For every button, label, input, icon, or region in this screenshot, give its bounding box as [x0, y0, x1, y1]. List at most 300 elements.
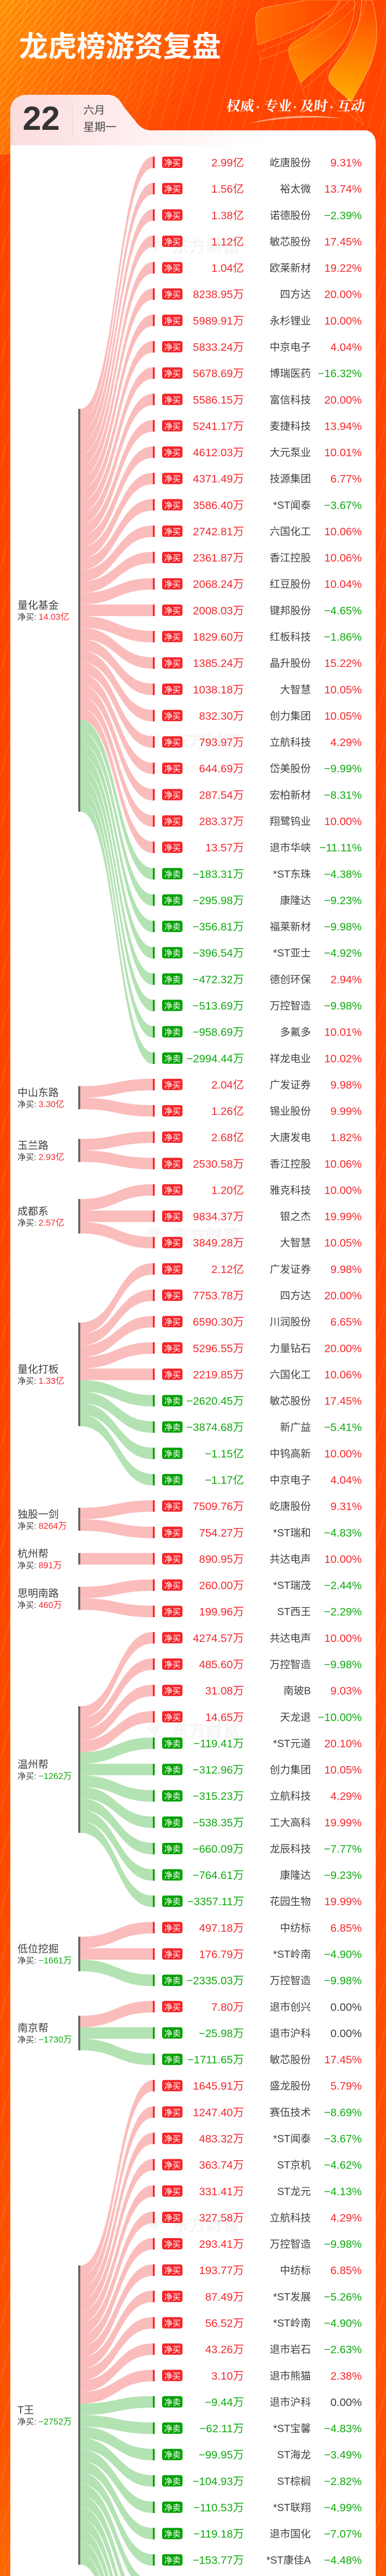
- row: 康隆达: 康隆达: [280, 894, 311, 906]
- row: 雅克科技: 1.20亿: [212, 1184, 244, 1196]
- row: *ST闻泰: [80, 499, 362, 570]
- row: 退市沪科: 退市沪科: [270, 2396, 311, 2408]
- row: ST棕榈: [80, 2438, 362, 2487]
- row: 六国化工: 2219.85万: [193, 1368, 244, 1381]
- row: *ST瑞茂: −2.44%: [324, 1580, 362, 1592]
- row: 盛龙股份: 净买: [164, 2082, 181, 2091]
- row: 退市岩石: 退市岩石: [270, 2344, 311, 2355]
- row: 祥龙电业: 净卖: [164, 1054, 181, 1063]
- row: 立航科技: 净卖: [164, 1792, 181, 1801]
- row: *ST岭南: 净买: [164, 1950, 181, 1959]
- row: 银之杰: [80, 1211, 362, 1223]
- row: 共达电声: 净买: [164, 1634, 181, 1643]
- row: 键邦股份: 净买: [164, 606, 181, 616]
- row: 立航科技: 793.97万: [199, 736, 244, 749]
- row: *ST发展: 净买: [164, 2293, 181, 2302]
- row: 大元泵业: 4612.03万: [193, 446, 244, 459]
- row: 雅克科技: [80, 1184, 362, 1211]
- row: 万控智造: [80, 1960, 362, 1987]
- row: 六国化工: 六国化工: [270, 526, 311, 538]
- group: T王: [17, 2080, 362, 2576]
- row: 晶升股份: 15.22%: [324, 657, 362, 670]
- row: 麦捷科技: [80, 420, 362, 535]
- row: 银之杰: 9834.37万: [193, 1211, 244, 1223]
- row: 退市国化: 净卖: [164, 2530, 181, 2539]
- row: ST达华: [80, 2484, 362, 2576]
- row: ST海龙: −3.49%: [324, 2449, 362, 2461]
- row: 翔鹭钨业: 翔鹭钨业: [270, 816, 311, 827]
- row: 广发证券: 9.98%: [330, 1079, 362, 1091]
- decorative flame leaves: [256, 0, 377, 125]
- row: 祥龙电业: −2994.44万: [186, 1053, 244, 1065]
- row: 富信科技: 净买: [164, 396, 181, 405]
- row: 屹唐股份: [80, 1500, 362, 1519]
- row: *ST闻泰: −3.67%: [324, 2133, 362, 2145]
- row: 福莱新材: 福莱新材: [270, 921, 311, 933]
- row: 万控智造: −9.98%: [324, 1658, 362, 1671]
- row: *ST元道: 净卖: [164, 1739, 181, 1749]
- row: 赛伍技术: 赛伍技术: [270, 2107, 311, 2119]
- row: *ST岭南: *ST岭南: [273, 2317, 311, 2329]
- row: 四方达: 8238.95万: [193, 289, 244, 301]
- row: ST棕榈: −2.82%: [324, 2475, 362, 2487]
- row: 裕太微: 净买: [164, 185, 181, 194]
- row: 康隆达: [80, 1810, 362, 1882]
- row: 德创环保: [80, 766, 362, 986]
- row: 退市华峡: −11.11%: [320, 842, 362, 854]
- row: *ST中岩: [80, 2519, 362, 2576]
- row: 大智慧: 10.05%: [324, 1237, 362, 1249]
- row: 博瑞医药: −16.32%: [318, 367, 362, 380]
- row: 永杉锂业: 净买: [164, 316, 181, 326]
- row: *ST岭南: [80, 1948, 362, 1961]
- row: 雅克科技: 净买: [164, 1186, 181, 1195]
- row: 创力集团: 10.05%: [324, 710, 362, 722]
- group label: 净买: 8264万: [17, 1521, 67, 1531]
- row: *ST发展: *ST发展: [273, 2291, 311, 2303]
- row: 立航科技: 立航科技: [270, 1790, 311, 1802]
- row: 香江控股: 10.06%: [324, 552, 362, 564]
- watermark logos: 东方财富: [172, 1226, 240, 1245]
- row: 万控智造: [80, 777, 362, 1012]
- group label: 净买: 2.57亿: [17, 1218, 64, 1228]
- row: 四方达: 净买: [164, 290, 181, 299]
- row: ST京机: 净买: [164, 2161, 181, 2170]
- row: 花园生物: [80, 1821, 362, 1908]
- row: 诺德股份: [80, 209, 362, 444]
- row: 岱美股份: [80, 673, 362, 775]
- row: 创力集团: [80, 651, 362, 722]
- row: 宏柏新材: [80, 685, 362, 801]
- row: 技源集团: 技源集团: [270, 473, 311, 485]
- row: 龙辰科技: −7.77%: [324, 1843, 362, 1855]
- row: 立航科技: [80, 662, 362, 749]
- group label: [17, 1548, 62, 1570]
- row: 富信科技: 20.00%: [324, 394, 362, 406]
- row: 广发证券: 2.12亿: [212, 1263, 244, 1276]
- row: 屹唐股份: 9.31%: [330, 157, 362, 169]
- row: 共达电声: [80, 1553, 362, 1565]
- row: 赛伍技术: 净买: [164, 2108, 181, 2117]
- row: 屹唐股份: 屹唐股份: [270, 157, 311, 169]
- row: 红板科技: 1829.60万: [193, 631, 244, 643]
- row: 川润股份: 川润股份: [270, 1316, 311, 1328]
- group label: 净买: 2.93亿: [17, 1152, 64, 1162]
- row: ST京机: −4.62%: [324, 2159, 362, 2172]
- row: ST龙元: 331.41万: [199, 2185, 244, 2198]
- row: 南玻B: 南玻B: [284, 1685, 311, 1697]
- row: ST龙元: [80, 2185, 362, 2323]
- row: *ST宝馨: −62.11万: [200, 2422, 244, 2435]
- row: 敏芯股份: 1.12亿: [212, 235, 244, 248]
- row: *ST发展: [80, 2291, 362, 2369]
- row: 力量钻石: 20.00%: [324, 1342, 362, 1354]
- group label: [17, 1587, 62, 1610]
- row: *ST发展: −5.26%: [324, 2291, 362, 2303]
- row: 万控智造: 485.60万: [199, 1658, 244, 1671]
- row: 退市华峡: 退市华峡: [270, 842, 311, 854]
- row: 德创环保: −472.32万: [192, 973, 244, 986]
- row: ST棕榈: ST棕榈: [277, 2476, 311, 2487]
- row: *ST闻泰: −3.67%: [324, 499, 362, 512]
- row: 万控智造: [80, 2238, 362, 2346]
- row: *ST联翔: −4.99%: [324, 2502, 362, 2514]
- row: *ST瑞茂: *ST瑞茂: [273, 1580, 311, 1591]
- row: ST棕榈: 净卖: [164, 2477, 181, 2486]
- row: 大元泵业: 净买: [164, 448, 181, 457]
- row: 康隆达: −9.23%: [324, 1869, 362, 1882]
- row: 创力集团: 10.05%: [324, 1764, 362, 1776]
- row: 创力集团: [80, 1764, 362, 1776]
- group label: [17, 1943, 72, 1965]
- row: 大智慧: 大智慧: [280, 1237, 311, 1249]
- row: 退市沪科: 净卖: [164, 2029, 181, 2038]
- row: 大智慧: 净买: [164, 685, 181, 694]
- row: 岱美股份: −9.99%: [324, 762, 362, 775]
- row: 多氟多: [80, 789, 362, 1039]
- row: 香江控股: [80, 1150, 362, 1170]
- row: 南玻B: 9.03%: [330, 1685, 362, 1697]
- group label: 净买: −2752万: [17, 2417, 72, 2427]
- row: 屹唐股份: 净买: [164, 1502, 181, 1512]
- row: 中纺标: [80, 1922, 362, 1948]
- row: 立航科技: [80, 1775, 362, 1803]
- row: 翔鹭钨业: 283.37万: [199, 815, 244, 827]
- node bar: [78, 2016, 80, 2050]
- row: 宏柏新材: 净买: [164, 791, 181, 800]
- row: 川润股份: [80, 1316, 362, 1357]
- row: *ST闻泰: *ST闻泰: [273, 2133, 311, 2145]
- row: *ST瑞和: [80, 1519, 362, 1539]
- group: 杭州帮: [17, 1548, 362, 1570]
- row: ST西王: [80, 1598, 362, 1618]
- row: 香江控股: [80, 552, 362, 593]
- row: 大唐发电: 大唐发电: [270, 1132, 311, 1144]
- node bar: [78, 1139, 80, 1162]
- row: 德创环保: 净卖: [164, 975, 181, 985]
- row: 龙辰科技: −660.09万: [192, 1843, 244, 1855]
- group label: 净买: −1262万: [17, 1771, 72, 1781]
- row: *ST亚士: *ST亚士: [273, 947, 311, 959]
- node bar: [78, 1553, 80, 1565]
- row: 锡业股份: 净买: [164, 1107, 181, 1116]
- row: *ST东珠: *ST东珠: [273, 868, 311, 880]
- node bar: [78, 409, 80, 812]
- row: 退市熊猫: 净买: [164, 2371, 181, 2381]
- row: 永杉锂业: [80, 315, 362, 489]
- row: 南玻B: [80, 1685, 362, 1741]
- row: 共达电声: 净买: [164, 1555, 181, 1564]
- row: 盛龙股份: 5.79%: [330, 2080, 362, 2092]
- row: 中钨高新: 10.00%: [324, 1448, 362, 1460]
- row: 立航科技: 净买: [164, 2213, 181, 2223]
- row: *ST岭南: −4.90%: [324, 2317, 362, 2330]
- row: 万控智造: 净买: [164, 1660, 181, 1669]
- row: 诺德股份: −2.39%: [324, 209, 362, 222]
- row: 创力集团: −312.96万: [192, 1764, 244, 1776]
- row: 盛龙股份: 盛龙股份: [270, 2080, 311, 2092]
- row: 欧莱新材: 净买: [164, 264, 181, 273]
- row: 技源集团: 6.77%: [330, 473, 362, 485]
- row: 宏柏新材: −8.31%: [324, 789, 362, 801]
- row: ST龙元: −4.13%: [324, 2185, 362, 2198]
- row: 六国化工: 净买: [164, 528, 181, 537]
- row: 技源集团: 4371.49万: [193, 473, 244, 485]
- row: 雅克科技: 雅克科技: [270, 1184, 311, 1196]
- row: *ST闻泰: [80, 2133, 362, 2300]
- row: 屹唐股份: 7509.76万: [193, 1500, 244, 1513]
- row: *ST岭南: 176.79万: [199, 1948, 244, 1961]
- row: 万控智造: −513.69万: [192, 999, 244, 1012]
- group label: 净买: 460万: [17, 1600, 62, 1610]
- row: 中纺标: 净买: [164, 2266, 181, 2276]
- group label: 南京帮: [17, 2022, 48, 2034]
- row: 福莱新材: −356.81万: [192, 921, 244, 933]
- row: 祥龙电业: 10.02%: [324, 1053, 362, 1065]
- row: *ST康佳A: *ST康佳A: [266, 2554, 311, 2566]
- row: 龙辰科技: 龙辰科技: [270, 1843, 311, 1855]
- row: 屹唐股份: 净买: [164, 159, 181, 168]
- row: 屹唐股份: 9.31%: [330, 1500, 362, 1513]
- row: 中京电子: 中京电子: [270, 341, 311, 353]
- row: 大元泵业: 大元泵业: [270, 447, 311, 459]
- row: *ST宝馨: −4.83%: [324, 2422, 362, 2435]
- row: 工大高科: 净卖: [164, 1818, 181, 1827]
- group label: 杭州帮: [17, 1548, 48, 1560]
- row: 大元泵业: [80, 446, 362, 547]
- row: 中纺标: 193.77万: [199, 2264, 244, 2277]
- row: 香江控股: 2530.58万: [193, 1158, 244, 1170]
- row: ST西王: 199.96万: [199, 1606, 244, 1618]
- row: 岱美股份: 净买: [164, 765, 181, 774]
- row: 立航科技: 立航科技: [270, 737, 311, 749]
- row: 岱美股份: 644.69万: [199, 762, 244, 775]
- row: 退市沪科: −9.44万: [205, 2396, 244, 2409]
- row: 技源集团: [80, 473, 362, 558]
- row: 康隆达: −764.61万: [192, 1869, 244, 1882]
- row: *ST东珠: −4.38%: [324, 868, 362, 880]
- row: ST海龙: ST海龙: [277, 2449, 311, 2461]
- row: 四方达: 7753.78万: [193, 1290, 244, 1302]
- row: 万控智造: −9.98%: [324, 2238, 362, 2250]
- row: 共达电声: 10.00%: [324, 1553, 362, 1565]
- row: 立航科技: [80, 2212, 362, 2334]
- group label: [17, 600, 69, 622]
- watermark logos: [146, 237, 240, 2576]
- row: 晶升股份: [80, 628, 362, 670]
- row: *ST宝馨: 净卖: [164, 2425, 181, 2434]
- row: 退市华峡: [80, 708, 362, 854]
- row: *ST岭南: [80, 2317, 362, 2381]
- row: *ST亚士: 净卖: [164, 949, 181, 958]
- row: 博瑞医药: 净买: [164, 369, 181, 379]
- row: 香江控股: 香江控股: [270, 552, 311, 564]
- row: 欧莱新材: [80, 262, 362, 466]
- row: 力量钻石: 净买: [164, 1344, 181, 1353]
- row: 退市国化: 退市国化: [270, 2528, 311, 2540]
- row: 宏柏新材: 287.54万: [199, 789, 244, 801]
- row: 晶升股份: 净买: [164, 659, 181, 668]
- row: *ST闻泰: 3586.40万: [193, 499, 244, 512]
- row: 锡业股份: [80, 1098, 362, 1117]
- row: 退市国化: [80, 2461, 362, 2540]
- group label: [17, 2022, 72, 2044]
- row: 东方碳素: [80, 2507, 362, 2576]
- row: 天龙退: 天龙退: [280, 1711, 311, 1723]
- row: 盛龙股份: 1645.91万: [193, 2080, 244, 2092]
- row: 富信科技: [80, 394, 362, 524]
- row: 共达电声: 共达电声: [270, 1632, 311, 1644]
- row: *ST东珠: 净卖: [164, 870, 181, 879]
- row: *ST闻泰: *ST闻泰: [273, 499, 311, 511]
- row: *ST岭南: *ST岭南: [273, 1948, 311, 1960]
- row: 键邦股份: 2008.03万: [193, 604, 244, 617]
- row: 诺德股份: 诺德股份: [270, 210, 311, 222]
- row: 工大高科: 19.99%: [324, 1817, 362, 1829]
- row: 中京电子: [80, 1415, 362, 1486]
- row: 万控智造: 万控智造: [270, 1659, 311, 1670]
- row: *ST元道: 20.10%: [324, 1737, 362, 1750]
- row: 退市创兴: [80, 2001, 362, 2027]
- row: 花园生物: 花园生物: [270, 1896, 311, 1908]
- date tab: [10, 95, 376, 145]
- row: ST京机: 363.74万: [199, 2159, 244, 2172]
- group label: 净买: −1661万: [17, 1956, 72, 1965]
- row: 四方达: 净买: [164, 1291, 181, 1300]
- row: 裕太微: 裕太微: [280, 183, 311, 195]
- group label: 玉兰路: [17, 1140, 48, 1151]
- row: 万控智造: 净卖: [164, 1976, 181, 1986]
- row: 天龙退: [80, 1711, 362, 1752]
- title: 龙虎榜游资复盘: [19, 24, 221, 65]
- tagline: 及时: [299, 95, 329, 115]
- row: 天龙退: −10.00%: [318, 1711, 362, 1723]
- group label: 量化打板: [17, 1364, 59, 1376]
- row: 退市岩石: 净买: [164, 2345, 181, 2354]
- row: 立航科技: 4.29%: [330, 736, 362, 749]
- row: 立航科技: 4.29%: [330, 1790, 362, 1803]
- group label: 净买: 1.33亿: [17, 1376, 64, 1386]
- row: 中京电子: 净卖: [164, 1476, 181, 1485]
- group: 中山东路: [17, 1079, 362, 1117]
- row: ST海龙: −99.95万: [199, 2449, 244, 2461]
- row: 南玻B: 31.08万: [205, 1685, 244, 1697]
- row: 红板科技: 净买: [164, 633, 181, 642]
- row: 新广益: 净卖: [164, 1423, 181, 1432]
- row: 万控智造: −9.98%: [324, 1975, 362, 1987]
- row: 宏柏新材: 宏柏新材: [270, 789, 311, 801]
- node bar: [78, 2265, 80, 2565]
- group label: 成都系: [17, 1206, 48, 1217]
- row: 红豆股份: 2068.24万: [193, 578, 244, 590]
- row: 盛龙股份: [80, 2080, 362, 2277]
- row: *ST闻泰: 净买: [164, 501, 181, 510]
- row: 敏芯股份: 敏芯股份: [270, 1395, 311, 1407]
- row: 中钨高新: 中钨高新: [270, 1448, 311, 1460]
- row: ST京机: [80, 2159, 362, 2311]
- tagline: 权威: [225, 95, 255, 115]
- row: 中钨高新: −1.15亿: [205, 1448, 244, 1460]
- row: 永杉锂业: 10.00%: [324, 315, 362, 327]
- row: 银之杰: 银之杰: [280, 1211, 311, 1223]
- row: 敏芯股份: 17.45%: [324, 2054, 362, 2066]
- row: *ST亚士: [80, 2496, 362, 2576]
- row: 锡业股份: 9.99%: [330, 1105, 362, 1117]
- row: *ST亚士: [80, 754, 362, 959]
- row: 四方达: 20.00%: [324, 289, 362, 301]
- node bar: [78, 1086, 80, 1109]
- row: 共达电声: 4274.57万: [193, 1632, 244, 1645]
- row: 万控智造: −9.98%: [324, 999, 362, 1012]
- row: *ST瑞和: *ST瑞和: [273, 1527, 311, 1539]
- row: 晶升股份: 1385.24万: [193, 657, 244, 670]
- row: 敏芯股份: 净卖: [164, 2056, 181, 2065]
- watermark logos: 东方财富: [172, 1721, 240, 1740]
- row: 退市熊猫: 3.10万: [212, 2370, 244, 2382]
- row: 共达电声: 10.00%: [324, 1632, 362, 1645]
- row: *ST元道: *ST元道: [273, 1738, 311, 1750]
- row: 中纺标: 6.85%: [330, 1922, 362, 1934]
- group: 量化打板: [17, 1263, 362, 1486]
- row: 退市熊猫: [80, 2370, 362, 2403]
- row: 新广益: 新广益: [280, 1421, 311, 1433]
- row: 永杉锂业: 5989.91万: [193, 315, 244, 327]
- row: 广发证券: 广发证券: [270, 1263, 311, 1275]
- node bar: [78, 1706, 80, 1833]
- tagline: [225, 95, 366, 124]
- row: ST西王: 净买: [164, 1607, 181, 1617]
- row: 大智慧: [80, 639, 362, 696]
- row: 博瑞医药: 博瑞医药: [270, 368, 311, 380]
- row: 大智慧: 3849.28万: [193, 1237, 244, 1249]
- row: *ST宝馨: *ST宝馨: [273, 2422, 311, 2435]
- row: 六国化工: [80, 1368, 362, 1381]
- row: 中京电子: −1.17亿: [205, 1474, 244, 1486]
- row: 大智慧: 10.05%: [324, 684, 362, 696]
- group label: [17, 1087, 64, 1109]
- row: *ST岭南: 56.52万: [205, 2317, 244, 2330]
- row: 中钨高新: [80, 1403, 362, 1460]
- group: 温州帮: [17, 1632, 362, 1908]
- row: *ST联翔: −110.53万: [194, 2502, 244, 2514]
- row: 香江控股: 净买: [164, 1160, 181, 1169]
- row: 万控智造: [80, 1658, 362, 1729]
- group label: [17, 1140, 64, 1162]
- row: 中纺标: 497.18万: [199, 1922, 244, 1934]
- row: 万控智造: 293.41万: [199, 2238, 244, 2250]
- row: *ST瑞和: −4.83%: [324, 1527, 362, 1539]
- row: 康隆达: −295.98万: [192, 894, 244, 907]
